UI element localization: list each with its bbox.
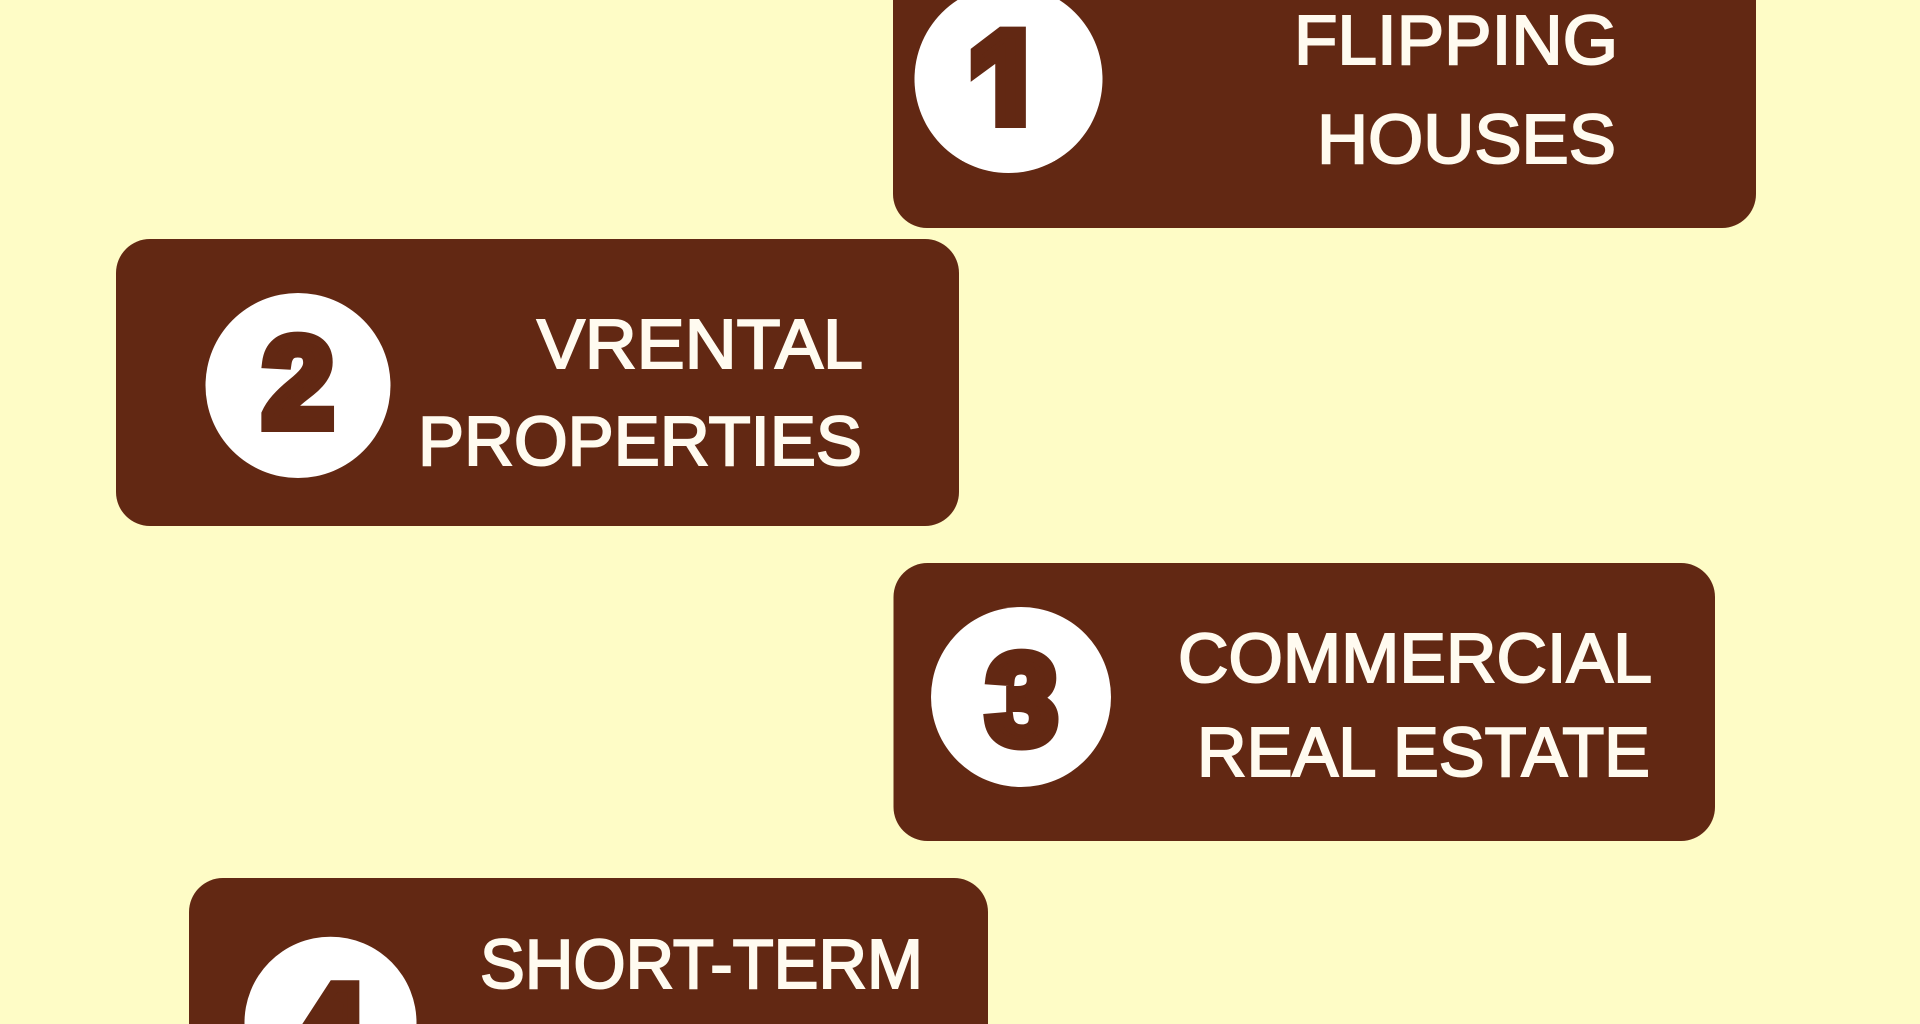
- text: vrental properties: PROPERTIES: [418, 402, 862, 480]
- text: vrental properties: [418, 305, 863, 480]
- text: flipping houses: HOUSES: [1317, 100, 1616, 178]
- icon: number 2 badge: [206, 293, 390, 478]
- text: commercial real estate: COMMERCIAL: [1178, 619, 1652, 697]
- text: commercial real estate: REAL ESTATE: [1197, 713, 1650, 791]
- panel: card 3 commercial real estate: [894, 563, 1715, 841]
- panel: card 2 rental properties: [116, 239, 959, 526]
- card 1 background: [893, 0, 1756, 228]
- text: flipping houses: [1294, 1, 1618, 178]
- icon: number 1 badge: 1: [966, 0, 1048, 191]
- icon: number 3 badge: 3: [987, 629, 1057, 770]
- text: flipping houses: FLIPPING: [1294, 1, 1618, 79]
- icon: number 4 badge circle: [244, 937, 416, 1024]
- card 3 background: [894, 563, 1715, 841]
- text: vrental properties: VRENTAL: [537, 305, 863, 383]
- card 2 background: [116, 239, 959, 526]
- card 4 background: [189, 878, 988, 1024]
- text: short-term: SHORT-TERM: [480, 925, 923, 1003]
- icon: number 2 badge: 2: [263, 312, 333, 453]
- text: commercial real estate: [1178, 619, 1652, 791]
- panel: card 1 flipping houses: [893, 0, 1756, 228]
- icon: number 3 badge: [931, 607, 1111, 787]
- panel: card 4 short-term: [189, 878, 988, 1024]
- icon: number 1 badge: [914, 0, 1102, 191]
